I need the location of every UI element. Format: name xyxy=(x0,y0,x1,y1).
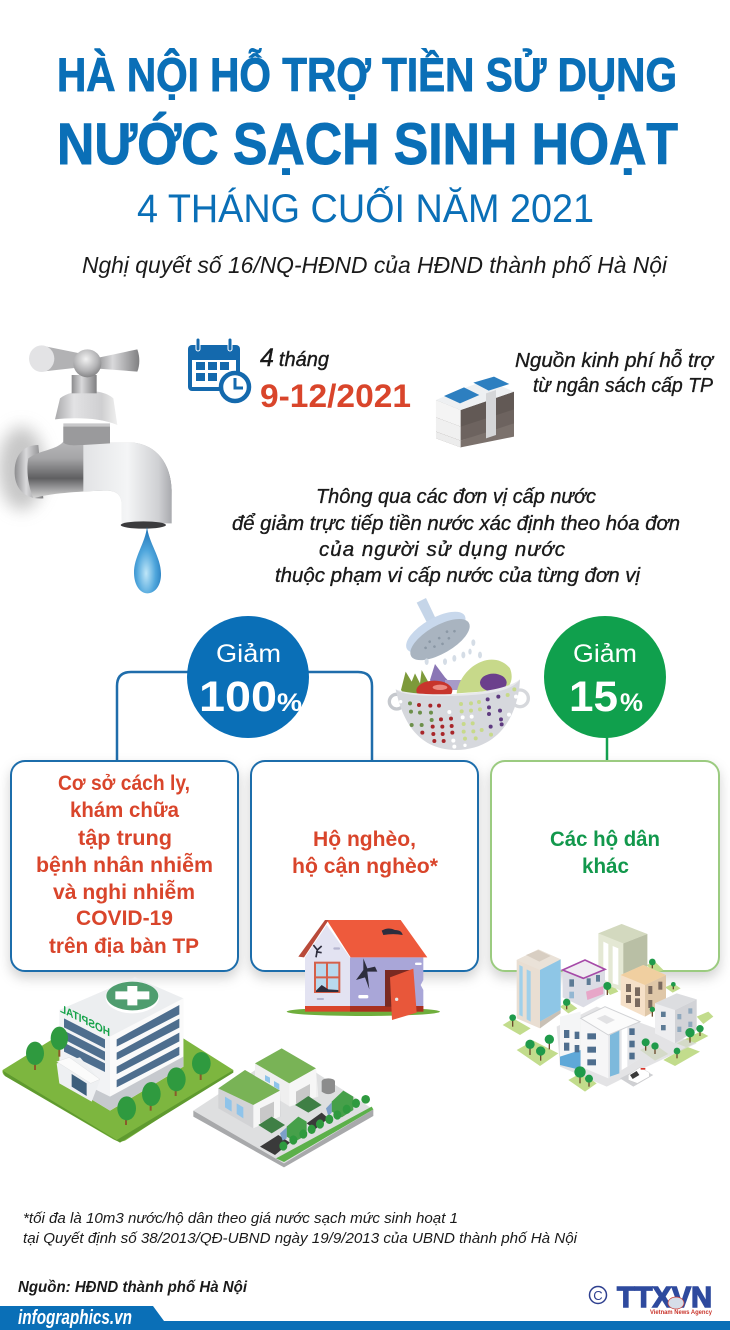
icon: quarantine camp with army vehicles xyxy=(193,1048,373,1167)
logo: TTXVN: TTXVN xyxy=(617,1282,712,1314)
green connector xyxy=(606,735,608,763)
logo: TTXVN: Vietnam News Agency xyxy=(650,1309,712,1316)
panel: other households: Các hộ dân xyxy=(550,828,660,851)
panel: quarantine and treatment facilities: Cơ sở cách ly, xyxy=(58,772,190,795)
icon: damaged house xyxy=(287,920,440,1020)
footer bar xyxy=(0,1306,730,1330)
badge: reduce 15%: % xyxy=(620,689,643,717)
source: Nguồn: HĐND thành phố Hà Nội xyxy=(18,1279,248,1296)
blue connector xyxy=(117,672,372,762)
description paragraph xyxy=(232,485,680,587)
badge: reduce 100%: 100 xyxy=(199,673,277,721)
badge: reduce 15%: 15 xyxy=(569,673,618,721)
footnote: *tối đa là 10m3 nước/hộ dân theo giá nước sạch mức sinh hoạt 1 xyxy=(23,1210,458,1227)
funding source text: từ ngân sách cấp TP xyxy=(533,374,713,397)
panel: poor households: Hộ nghèo, xyxy=(313,828,416,851)
description paragraph: của người sử dụng nước xyxy=(319,538,566,561)
duration text: 4tháng xyxy=(260,344,329,372)
panel: poor households: hộ cận nghèo* xyxy=(292,855,439,878)
subtitle: resolution: Nghị quyết số 16/NQ-HĐND của HĐND thành phố Hà Nội xyxy=(82,252,668,278)
icon: hospital xyxy=(2,977,233,1143)
panel: other households xyxy=(491,761,719,971)
panel: other households: khác xyxy=(582,855,629,878)
panel: quarantine and treatment facilities: COVID-19 xyxy=(76,907,173,930)
panel: quarantine and treatment facilities: khám chữa xyxy=(70,799,179,822)
badge: reduce 100% xyxy=(187,616,309,738)
panel: poor households xyxy=(251,761,478,971)
funding source text xyxy=(515,349,715,397)
description paragraph: Thông qua các đơn vị cấp nước xyxy=(316,485,597,508)
icon: water tap with drop xyxy=(0,345,172,593)
icon: hospital: HOSPITAL xyxy=(60,1001,110,1039)
icon: city buildings xyxy=(503,924,713,1092)
footer bar: infographics.vn xyxy=(18,1307,132,1329)
duration text: 9-12/2021 xyxy=(260,378,411,414)
footnote: tại Quyết định số 38/2013/QĐ-UBND ngày 19/9/2013 của UBND thành phố Hà Nội xyxy=(23,1230,578,1247)
panel: quarantine and treatment facilities: và nghi nhiễm xyxy=(53,880,195,904)
title: 4 THÁNG CUỐI NĂM 2021 xyxy=(137,185,594,231)
logo: TTXVN: C xyxy=(593,1288,603,1303)
icon: calendar with clock xyxy=(188,338,249,401)
badge: reduce 15%: Giảm xyxy=(573,640,637,668)
title xyxy=(57,48,678,231)
badge: reduce 15% xyxy=(544,616,666,738)
panel: quarantine and treatment facilities: trên địa bàn TP xyxy=(49,935,199,958)
badge: reduce 100%: % xyxy=(277,689,302,717)
duration text xyxy=(260,344,411,414)
icon: stacks of money xyxy=(436,377,514,447)
description paragraph: để giảm trực tiếp tiền nước xác định theo hóa đơn xyxy=(232,512,680,535)
funding source text: Nguồn kinh phí hỗ trợ xyxy=(515,349,715,372)
panel: quarantine and treatment facilities xyxy=(11,761,238,971)
footnote xyxy=(23,1210,578,1247)
description paragraph: thuộc phạm vi cấp nước của từng đơn vị xyxy=(275,564,641,587)
panel: quarantine and treatment facilities: bệnh nhân nhiễm xyxy=(36,853,213,877)
icon: shower over vegetable colander xyxy=(389,598,528,750)
panel: quarantine and treatment facilities: tập trung xyxy=(78,827,172,850)
badge: reduce 100%: Giảm xyxy=(216,640,281,668)
